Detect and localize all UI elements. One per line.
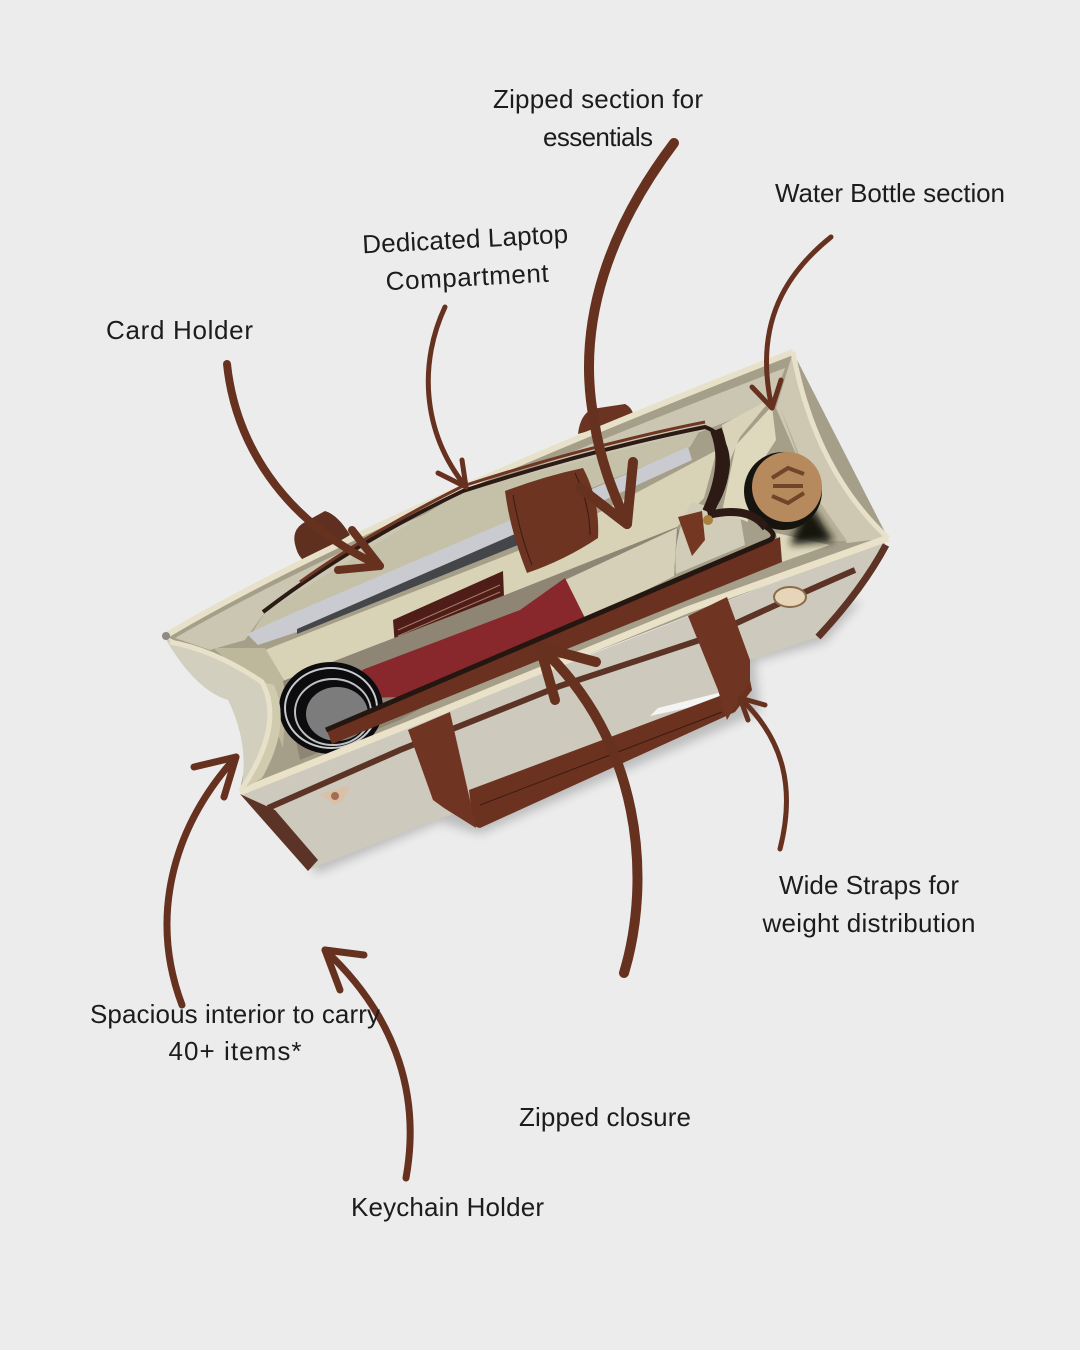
label: zipped section for essentials: Zipped section for (493, 84, 703, 114)
arrow: spacious interior (167, 757, 236, 1005)
label: wide straps (762, 870, 976, 938)
front rim piping (240, 538, 888, 792)
pouch zip ribbon and pull (678, 430, 766, 556)
dark cavity beside bottle (790, 508, 834, 545)
label: keychain holder: Keychain Holder (351, 1192, 544, 1222)
card holder (393, 571, 504, 646)
back handle loops (294, 404, 634, 562)
drop shadow under bag (300, 600, 862, 874)
arrow: keychain holder (325, 950, 410, 1178)
white gap seen through handle (650, 692, 724, 716)
arrow: zipped section (580, 143, 674, 524)
left corner studs (162, 632, 170, 640)
back wall lining (175, 368, 785, 650)
interior dark base (165, 352, 888, 790)
round disk behind pouch (675, 502, 745, 574)
back rim piping (165, 352, 793, 636)
label: zipped section for essentials: essentials (543, 122, 653, 152)
inner pocket panel behind laptop (250, 430, 700, 636)
label: dedicated laptop compartment: Dedicated Laptop (361, 219, 569, 259)
red umbrella (362, 578, 585, 698)
laptop (247, 447, 692, 645)
label: water bottle section: Water Bottle section (775, 178, 1005, 208)
arrow: wide straps (740, 698, 787, 849)
label: zipped section for essentials (493, 84, 703, 152)
beige cloth by umbrella (565, 528, 677, 622)
round flask lid (279, 662, 383, 754)
zipped pouch in front (326, 527, 782, 744)
arrow: laptop compartment (428, 307, 466, 487)
product photo: open tote bag (162, 352, 888, 874)
cavity floor (283, 527, 690, 760)
water bottle drawstring pouch (722, 406, 830, 562)
divider panel with card holder (265, 450, 717, 681)
front handle strap (408, 597, 752, 828)
left gusset fold (165, 638, 281, 790)
gold eyelet (774, 587, 806, 607)
label: wide straps: weight distribution (762, 908, 976, 938)
back zipper (263, 427, 728, 612)
back strap across interior (505, 468, 598, 573)
water bottle with cork (744, 452, 822, 530)
label: dedicated laptop compartment (361, 219, 571, 297)
keychain holder hardware (320, 786, 350, 805)
right wall lining (776, 352, 888, 543)
arrow: card holder (227, 364, 380, 570)
arrow: water bottle (752, 237, 831, 408)
label: wide straps: Wide Straps for (779, 870, 959, 900)
label: spacious interior: 40+ items* (168, 1036, 302, 1066)
arrow: zipped closure (540, 647, 637, 973)
label: card holder: Card Holder (106, 315, 253, 345)
front panel trim (240, 545, 886, 871)
front panel (240, 538, 888, 870)
label: spacious interior: Spacious interior to carry (90, 999, 380, 1029)
left back corner lining (213, 648, 287, 748)
label: spacious interior (90, 999, 380, 1066)
label: zipped closure: Zipped closure (519, 1102, 691, 1132)
label: dedicated laptop compartment: Compartment (385, 258, 550, 296)
cream sliver panel at back right (722, 398, 772, 465)
